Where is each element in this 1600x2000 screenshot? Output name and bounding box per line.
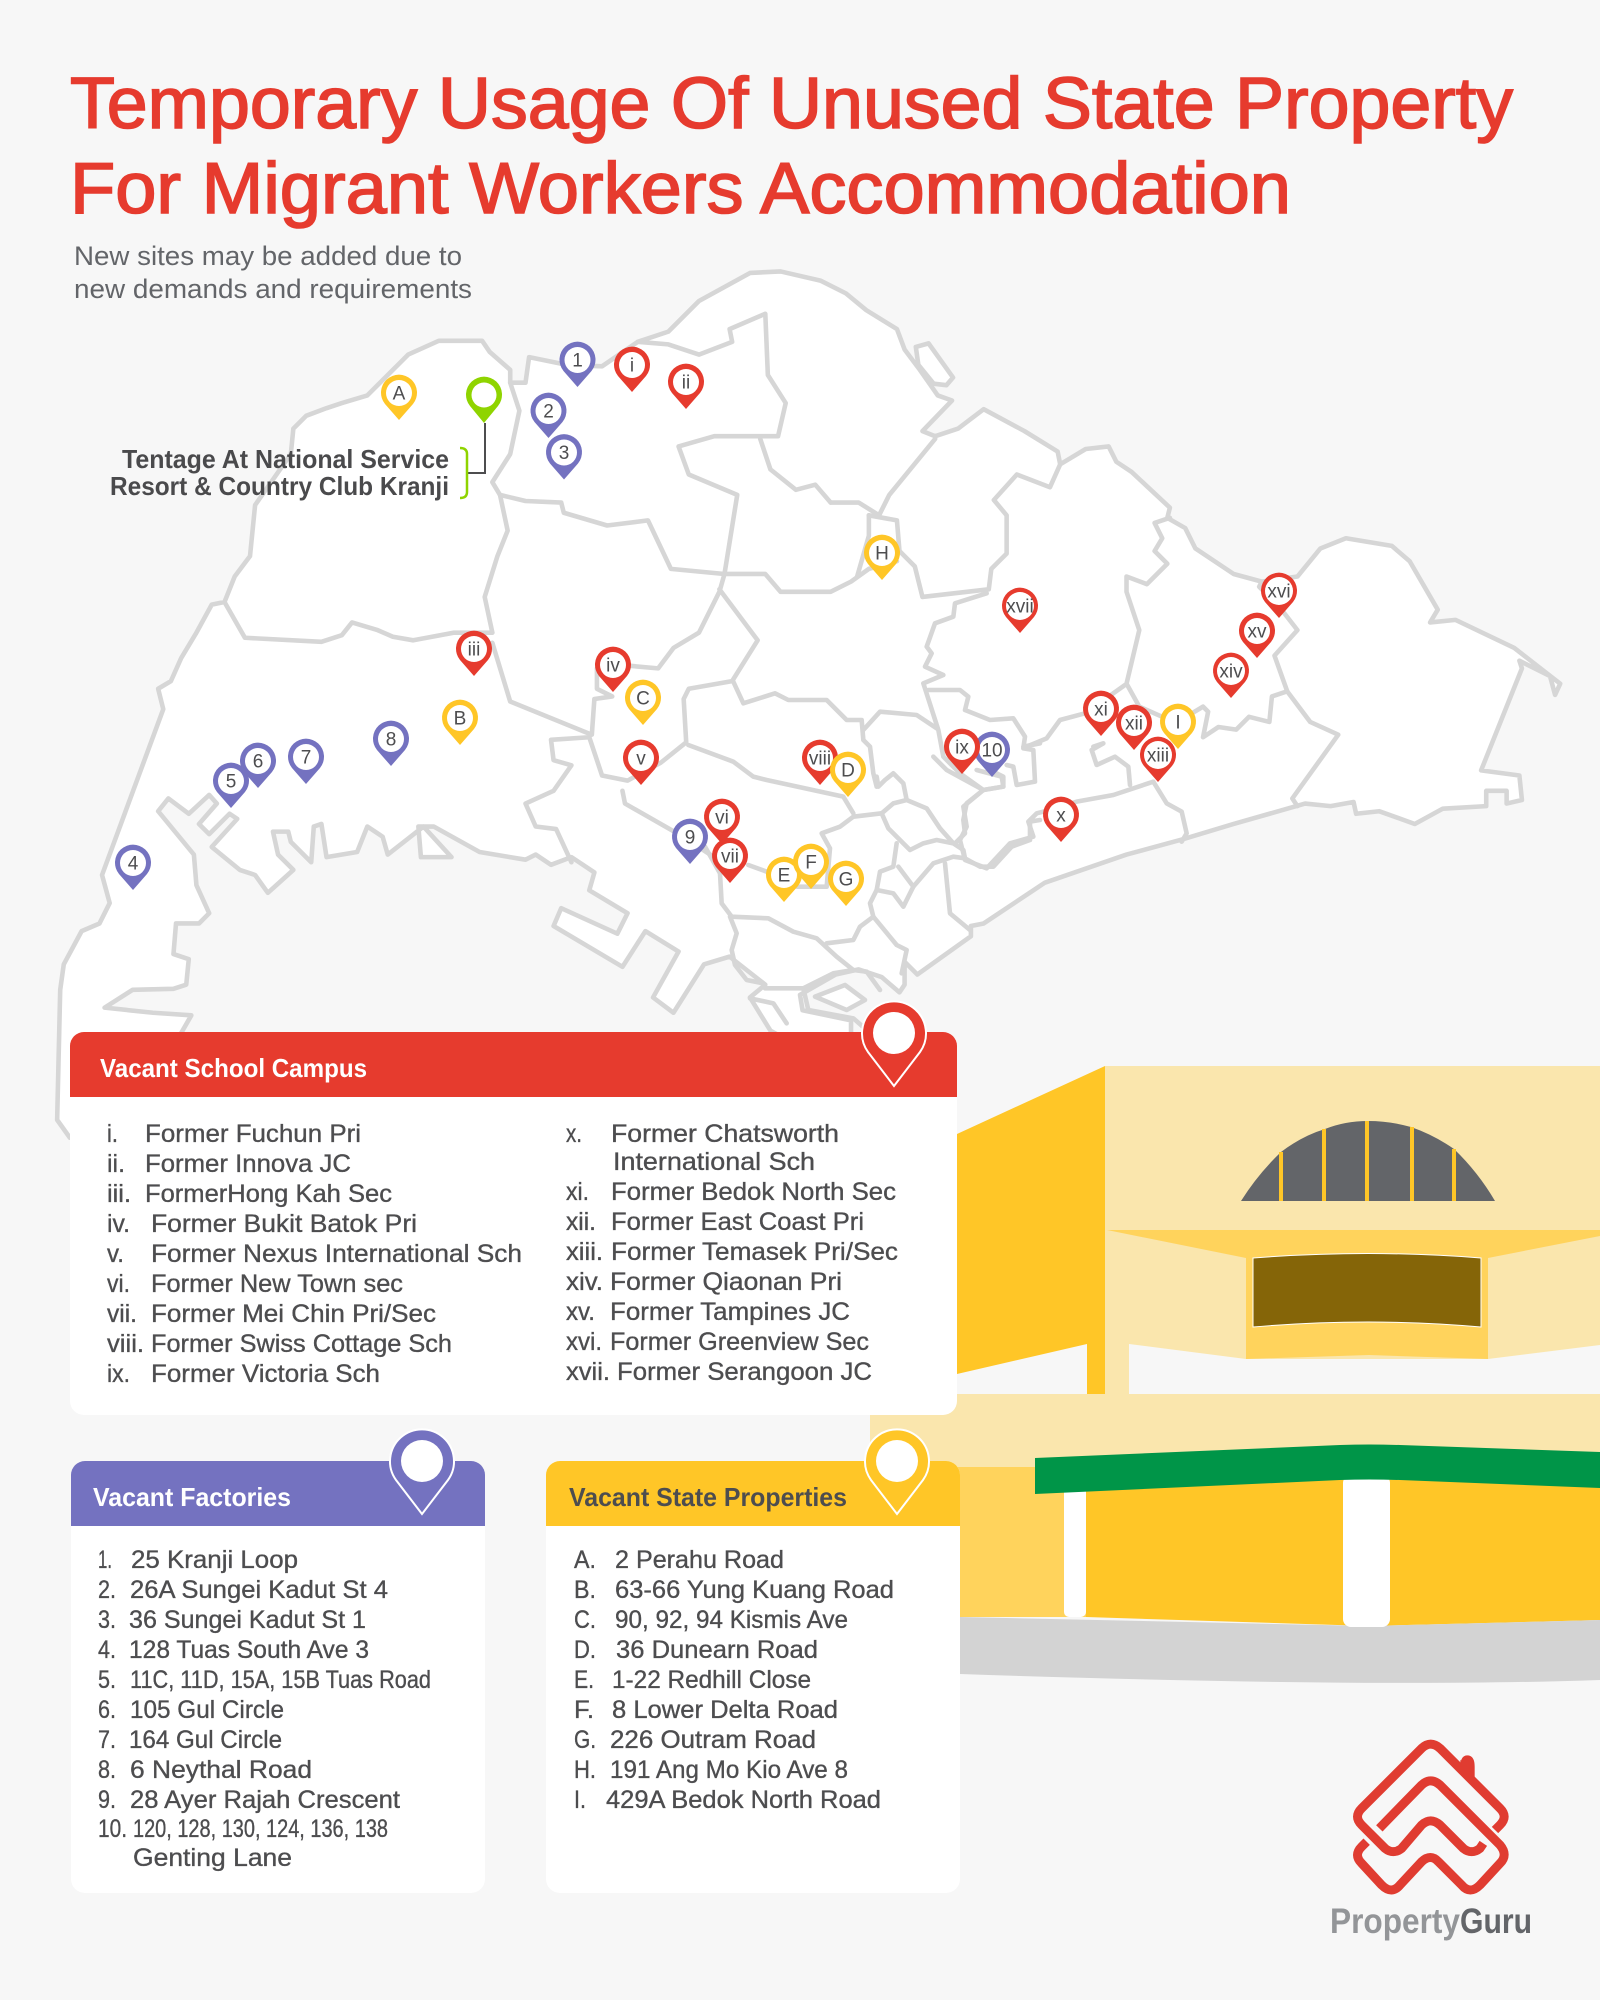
list: factories: 105 Gul Circle (130, 1696, 284, 1724)
list: schools column one (107, 1120, 522, 1388)
list: schools column one: iv. (107, 1210, 130, 1238)
list: schools column one: ii. (107, 1150, 125, 1178)
callout: Tentage At National Service Resort: Tentage At National Service (122, 444, 449, 474)
pin: vi (704, 799, 740, 844)
icon: red pin (862, 1001, 926, 1086)
subtitle: New sites may be added due to (74, 241, 462, 271)
pin: Kranji tentage (466, 377, 502, 423)
pin: ii: ii (682, 372, 690, 394)
pin: iv (595, 647, 631, 692)
pin: 3 (546, 434, 582, 480)
pin: 8 (373, 721, 409, 766)
pin: vi: vi (715, 808, 729, 828)
pin: H (864, 535, 900, 580)
pin: xiv: xiv (1219, 662, 1243, 682)
list: factories: 2. (98, 1576, 116, 1604)
pin: xiii: xiii (1147, 746, 1169, 766)
pin: 6: 6 (253, 752, 263, 772)
pin: 7: 7 (301, 748, 311, 768)
list: state properties: B. (574, 1576, 596, 1604)
list: schools column two: Former Greenview Sec (610, 1328, 869, 1356)
pin: 7 (288, 739, 324, 784)
list: schools column one: Former Nexus International Sch (151, 1240, 522, 1268)
pin: 10: 10 (981, 740, 1003, 762)
list: state properties (574, 1546, 894, 1814)
heading: Vacant Factories: Vacant Factories (93, 1482, 291, 1512)
list: schools column two: xiii. (566, 1238, 603, 1266)
pin: i (614, 347, 650, 392)
pin: 8: 8 (386, 730, 396, 750)
list: factories: 36 Sungei Kadut St 1 (129, 1606, 366, 1634)
title: For Migrant Workers Accommodation (70, 149, 1291, 229)
pin: iii (456, 631, 492, 676)
building illustration (870, 1066, 1600, 1683)
subtitle: new demands and requirements (74, 274, 472, 304)
pin: F: F (805, 852, 817, 874)
pin: E (766, 857, 802, 902)
list: schools column one: vii. (107, 1300, 137, 1328)
list: schools column two: xiv. (566, 1268, 603, 1296)
list: schools column one: Former Mei Chin Pri/Sec (151, 1300, 436, 1328)
list: state properties: D. (574, 1636, 596, 1664)
list: state properties: 63-66 Yung Kuang Road (615, 1576, 894, 1604)
list: state properties: 2 Perahu Road (615, 1546, 784, 1574)
pin: xiv (1213, 653, 1249, 698)
list: factories: 1. (98, 1546, 112, 1574)
subtitle (74, 241, 472, 304)
list: state properties: 191 Ang Mo Kio Ave 8 (610, 1756, 848, 1784)
panel: Vacant Factories (71, 1429, 485, 1893)
list: state properties: 90, 92, 94 Kismis Ave (615, 1606, 848, 1634)
list: factories: 9. (98, 1786, 116, 1814)
list: factories: 28 Ayer Rajah Crescent (130, 1786, 400, 1814)
heading: Vacant State Properties: Vacant State Properties (569, 1482, 847, 1512)
pin: v: v (636, 748, 646, 770)
list: schools column one: Former Bukit Batok Pri (151, 1210, 417, 1238)
list: factories: 10. (98, 1815, 127, 1843)
pin: xvi: xvi (1267, 582, 1291, 602)
pin: I: I (1175, 712, 1181, 734)
pin: I (1160, 704, 1196, 749)
pin: 4: 4 (128, 854, 139, 874)
title (70, 64, 1513, 229)
pin: D: D (841, 760, 855, 782)
list: state properties: I. (574, 1786, 586, 1814)
pin: A: A (393, 384, 406, 404)
pin: xii (1116, 705, 1152, 750)
list: factories: 8. (98, 1756, 116, 1784)
list: schools column one: Former Victoria Sch (151, 1360, 380, 1388)
pin: 6 (240, 743, 276, 788)
pin: xi (1083, 691, 1119, 736)
pin: xvi (1261, 573, 1297, 618)
pin: viii (802, 740, 838, 785)
list: schools column one: Former New Town sec (151, 1270, 403, 1298)
list: schools column one: Former Innova JC (145, 1150, 351, 1178)
pin: 5: 5 (226, 772, 236, 792)
pin: 2: 2 (543, 402, 554, 422)
pin: vii (712, 838, 748, 883)
list: state properties: 1-22 Redhill Close (612, 1666, 811, 1694)
pin: 9: 9 (685, 828, 695, 848)
pin: C: C (636, 688, 650, 710)
pin: xii: xii (1125, 714, 1143, 734)
list: schools column two: International Sch (613, 1148, 815, 1176)
list: factories: 3. (98, 1606, 116, 1634)
pin: 5 (213, 763, 249, 808)
icon: purple pin (390, 1429, 454, 1514)
list: schools column two: Former Chatsworth (611, 1120, 839, 1148)
list: schools column two: xvi. (566, 1328, 602, 1356)
pin: A (381, 375, 417, 420)
pin: x (1043, 797, 1079, 842)
pin: i: i (630, 356, 634, 376)
list: schools column one: Former Fuchun Pri (145, 1120, 361, 1148)
list: factories: 5. (98, 1666, 116, 1694)
pin: xvii: xvii (1006, 596, 1034, 618)
pin: 9 (672, 819, 708, 864)
list: state properties: 36 Dunearn Road (616, 1636, 818, 1664)
list: schools column one: ix. (107, 1360, 130, 1388)
list: state properties: 226 Outram Road (610, 1726, 816, 1754)
list: factories: 6. (98, 1696, 116, 1724)
pin: H: H (875, 544, 889, 564)
callout: Tentage At National Service Resort (110, 423, 485, 501)
list: schools column two: Former Bedok North Sec (611, 1178, 896, 1206)
pin: C (625, 680, 661, 725)
list: schools column two: Former Qiaonan Pri (610, 1268, 842, 1296)
list: factories: 164 Gul Circle (129, 1726, 282, 1754)
pin: E: E (778, 866, 790, 886)
pin: G (828, 861, 864, 906)
list: state properties: C. (574, 1606, 596, 1634)
pin: iii: iii (468, 640, 480, 660)
list: schools column one: iii. (107, 1180, 131, 1208)
pin: 4 (115, 845, 151, 890)
pin: iv: iv (606, 656, 620, 676)
title: Temporary Usage Of Unused State Property (70, 64, 1513, 144)
list: schools column one: vi. (107, 1270, 130, 1298)
list: state properties: E. (574, 1666, 594, 1694)
list: factories: 25 Kranji Loop (131, 1546, 298, 1574)
pin: v (623, 740, 659, 785)
list: schools column one: viii. (107, 1330, 144, 1358)
list: factories: 6 Neythal Road (130, 1756, 312, 1784)
list: schools column two (566, 1120, 898, 1386)
list: factories: 4. (98, 1636, 116, 1664)
pin: B (442, 700, 478, 745)
list: schools column two: xv. (566, 1298, 595, 1326)
list: schools column two: Former East Coast Pri (611, 1208, 864, 1236)
list: factories: 120, 128, 130, 124, 136, 138 (133, 1815, 388, 1843)
list: schools column two: xii. (566, 1208, 596, 1236)
pin: xv (1239, 613, 1275, 658)
list: factories: 26A Sungei Kadut St 4 (130, 1576, 388, 1604)
list: factories: Genting Lane (133, 1844, 292, 1872)
list: schools column one: v. (107, 1240, 124, 1268)
logo: PropertyGuru: Property (1330, 1902, 1460, 1941)
pin: ix: ix (955, 738, 969, 758)
pin: viii: viii (809, 748, 831, 770)
pin: D (830, 752, 866, 797)
list: factories: 128 Tuas South Ave 3 (129, 1636, 369, 1664)
pin: ii (668, 364, 704, 409)
pin: G: G (839, 870, 853, 890)
pin: 3: 3 (559, 443, 569, 464)
list: factories: 11C, 11D, 15A, 15B Tuas Road (130, 1666, 431, 1694)
list: state properties: 8 Lower Delta Road (612, 1696, 838, 1724)
list: schools column one: i. (107, 1120, 118, 1148)
list: factories (98, 1546, 431, 1872)
pin: xiii (1140, 737, 1176, 782)
logo: PropertyGuru (1330, 1744, 1532, 1941)
list: schools column two: Former Tampines JC (610, 1298, 850, 1326)
pin: B: B (454, 708, 466, 730)
logo: PropertyGuru: Guru (1460, 1902, 1532, 1941)
callout: Tentage At National Service Resort: Resort & Country Club Kranji (110, 471, 449, 501)
pin: 2 (530, 393, 566, 438)
pin: xvii (1002, 588, 1038, 633)
pin: 10 (974, 732, 1010, 777)
list: schools column two: Former Serangoon JC (617, 1358, 872, 1386)
list: schools column two: xvii. (566, 1358, 610, 1386)
list: state properties: 429A Bedok North Road (606, 1786, 881, 1814)
map pins (115, 342, 1297, 906)
list: factories: 7. (98, 1726, 116, 1754)
pin: 1: 1 (572, 350, 583, 372)
panel: Vacant School Campus (70, 1001, 957, 1415)
pin: x: x (1056, 806, 1066, 826)
icon: yellow pin (865, 1429, 929, 1514)
pin: vii: vii (721, 846, 739, 868)
list: schools column two: Former Temasek Pri/Sec (611, 1238, 898, 1266)
list: schools column two: xi. (566, 1178, 589, 1206)
panel: Vacant State Properties (546, 1429, 960, 1893)
list: schools column one: FormerHong Kah Sec (145, 1180, 392, 1208)
map of Singapore (57, 271, 1560, 1138)
pin: F (793, 844, 829, 889)
list: state properties: H. (574, 1756, 596, 1784)
list: state properties: G. (574, 1726, 596, 1754)
pin: ix (944, 729, 980, 774)
list: schools column two: x. (566, 1120, 582, 1148)
list: schools column one: Former Swiss Cottage Sch (151, 1330, 452, 1358)
heading: Vacant School Campus: Vacant School Campus (100, 1053, 367, 1083)
pin: 1 (560, 342, 596, 387)
pin: xv: xv (1248, 622, 1267, 642)
list: state properties: A. (574, 1546, 596, 1574)
pin: xi: xi (1094, 700, 1108, 720)
list: state properties: F. (574, 1696, 594, 1724)
